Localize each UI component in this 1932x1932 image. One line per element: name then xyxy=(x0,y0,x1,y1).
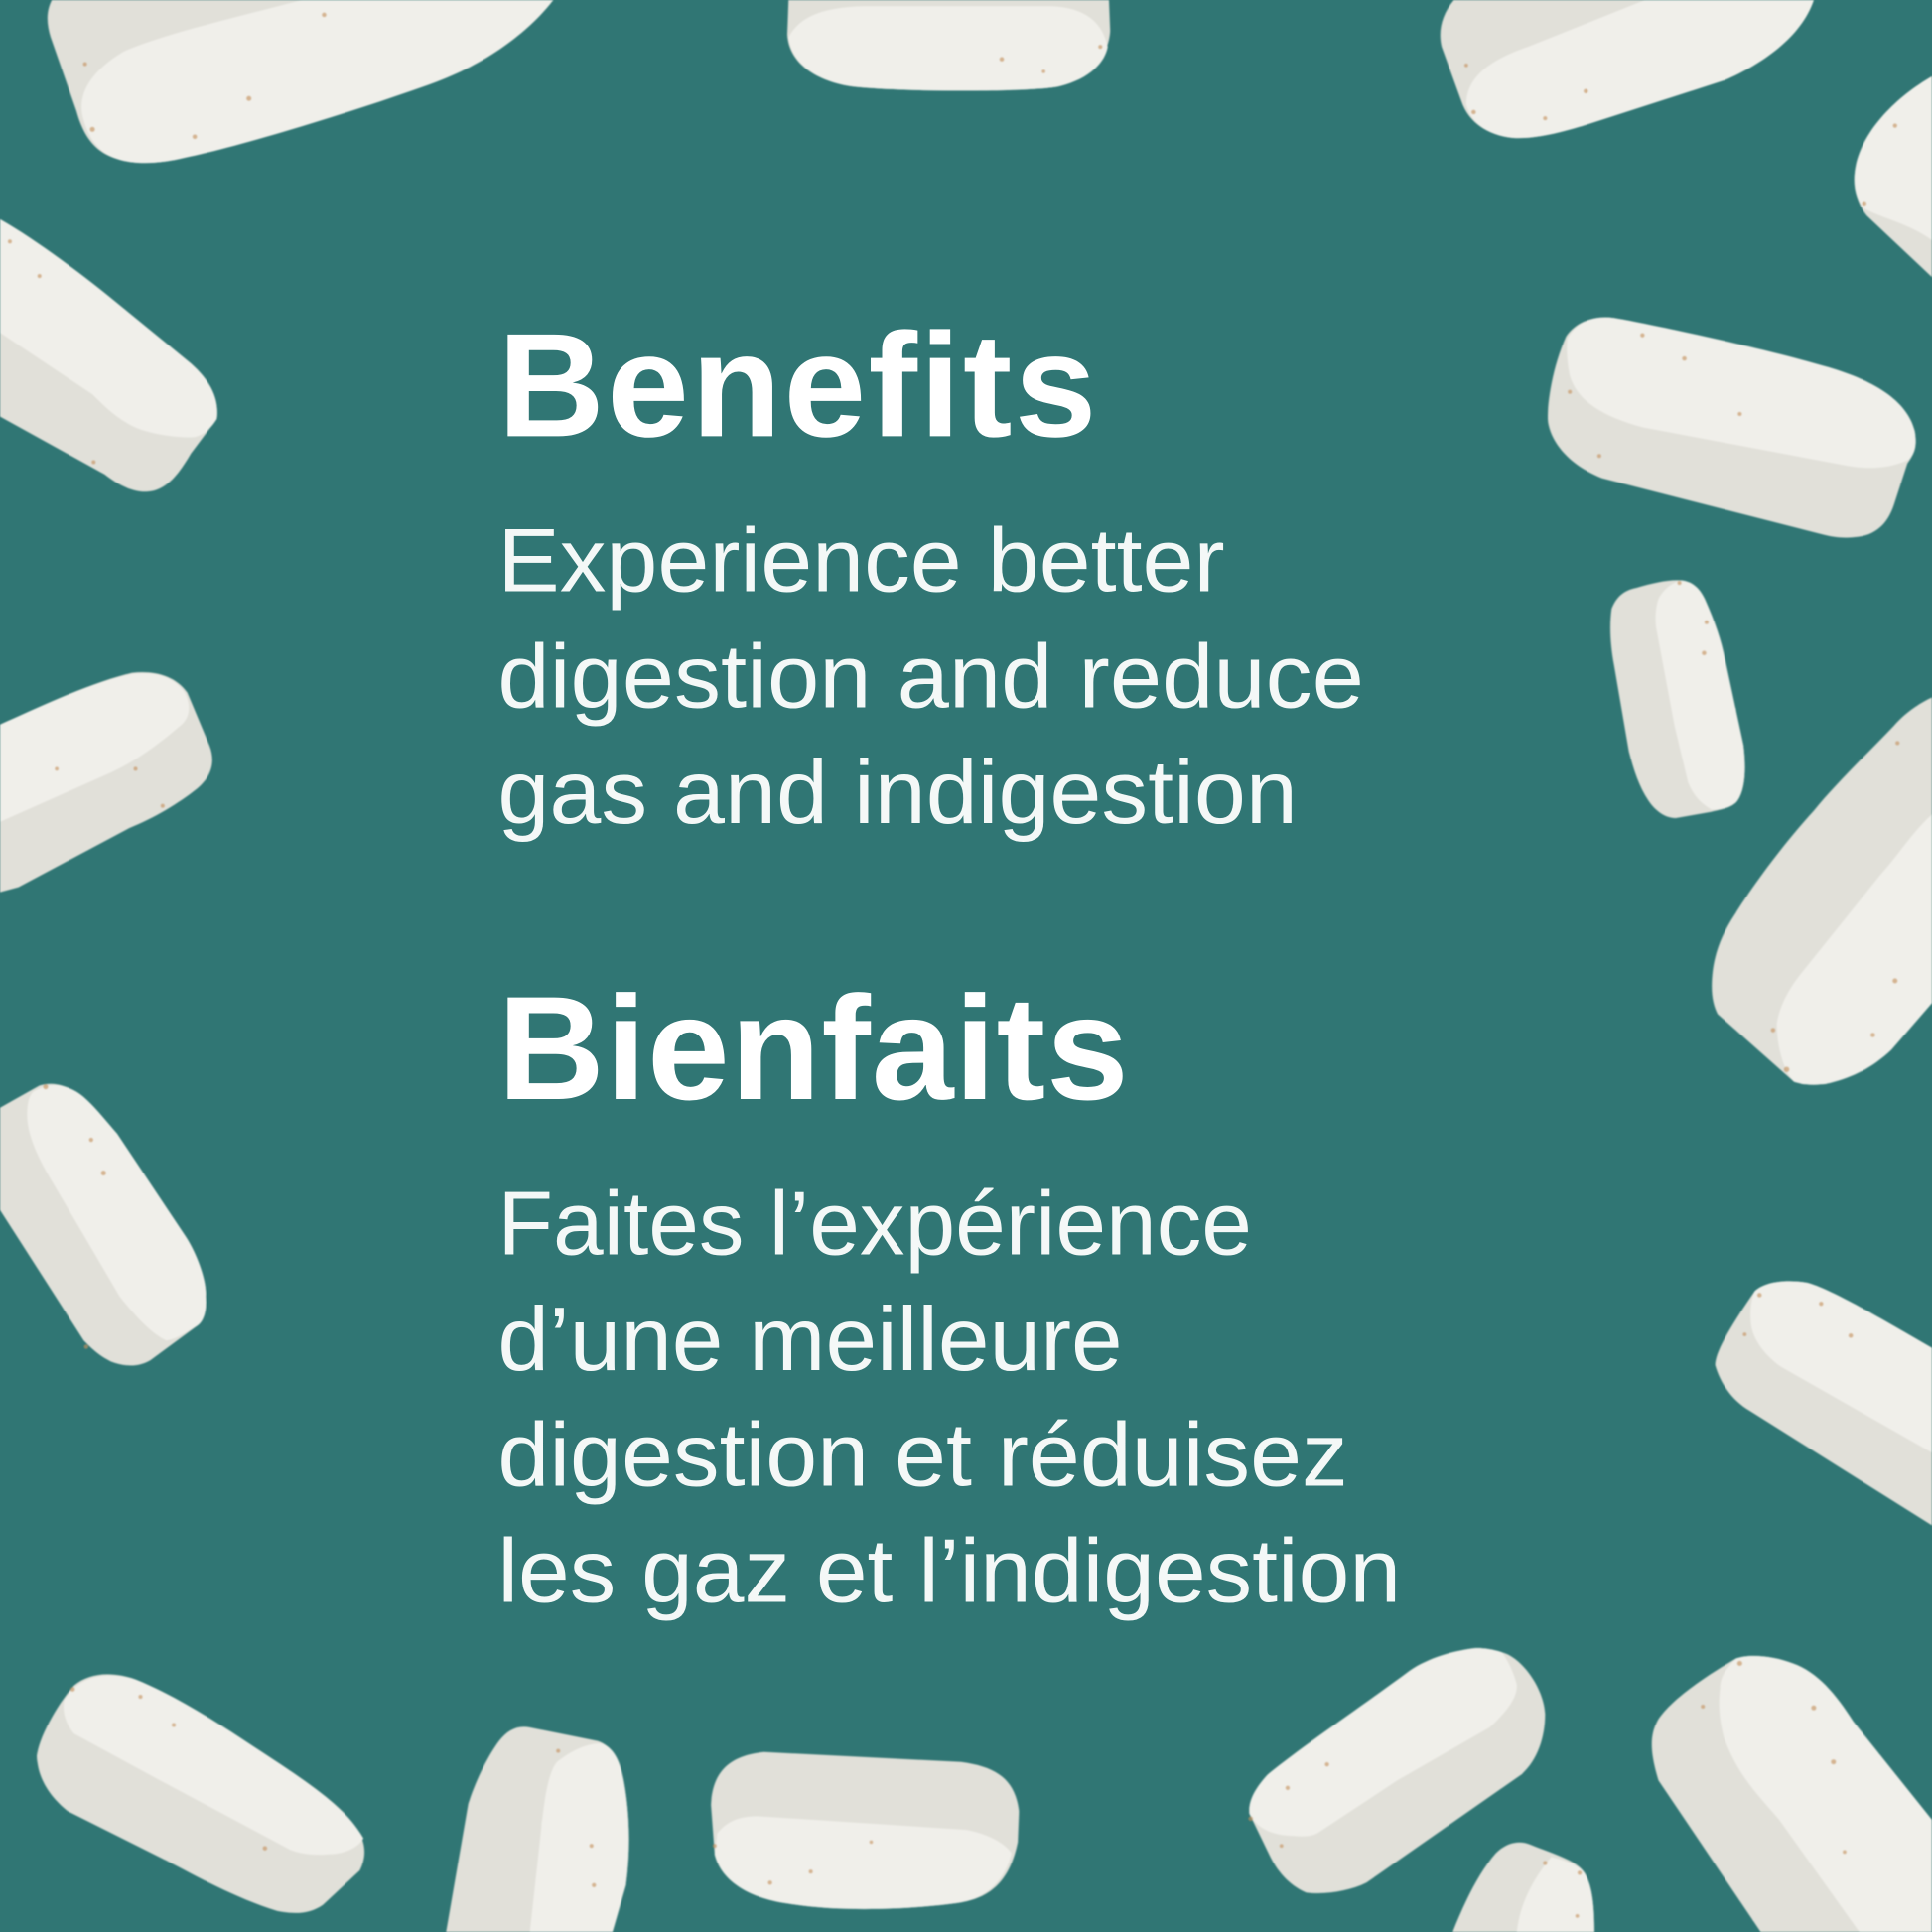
heading: Bienfaits: Bienfaits xyxy=(497,965,1129,1131)
text block: English description xyxy=(497,511,1364,843)
pill: bottom centre xyxy=(711,1752,1019,1909)
pill: middle left edge xyxy=(0,672,212,893)
text block: English description: Experience better xyxy=(497,511,1225,612)
pill: upper left edge xyxy=(0,219,217,491)
pill: right large xyxy=(1712,697,1932,1085)
pill: bottom small xyxy=(1452,1843,1594,1932)
pill: bottom left xyxy=(37,1674,364,1913)
pill: right upper large xyxy=(1548,318,1916,538)
text block: French description xyxy=(497,1173,1401,1621)
pill: top right xyxy=(1441,0,1814,138)
pill: upper right edge xyxy=(1855,76,1932,277)
pill: top left xyxy=(48,0,553,163)
text block: English description: gas and indigestion xyxy=(497,743,1298,843)
text block: French description: Faites l’expérience xyxy=(497,1173,1252,1274)
pill: top centre xyxy=(787,0,1110,91)
heading: Benefits: Benefits xyxy=(497,302,1097,468)
text block: French description: les gaz et l’indigestion xyxy=(497,1521,1401,1621)
text block: French description: d’une meilleure xyxy=(497,1290,1123,1390)
text block: English description: digestion and reduce xyxy=(497,626,1364,727)
pill: bottom right diagonal xyxy=(1248,1648,1545,1893)
pill: bottom right corner xyxy=(1652,1656,1932,1932)
text block: French description: digestion et réduisez xyxy=(497,1406,1348,1506)
pill: lower left edge xyxy=(0,1084,207,1365)
pill: bottom left upright xyxy=(446,1726,629,1932)
pill: right lower edge xyxy=(1716,1281,1932,1525)
pill: right small xyxy=(1610,580,1745,818)
